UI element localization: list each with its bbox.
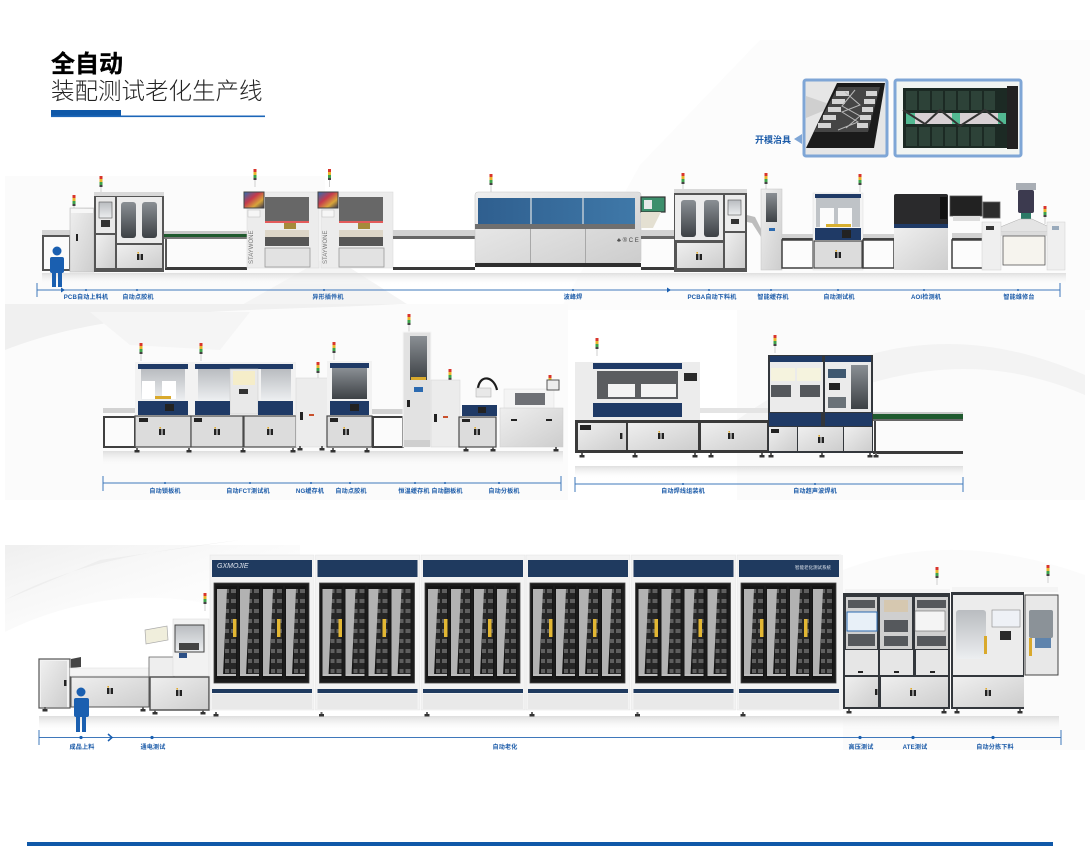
station labels: 智能缓存机: [757, 293, 789, 301]
machine: wire harness assembler: [575, 338, 700, 458]
machine: power-on test: [145, 593, 209, 714]
machine: product loader: [39, 657, 149, 712]
station labels: 成品上料: [70, 743, 94, 751]
station labels: PCBA自动下料机: [687, 293, 737, 301]
aging brand text: [217, 563, 831, 571]
conveyor: [164, 231, 247, 270]
machine: dispenser: [94, 176, 164, 272]
station labels: 自动点胶机: [122, 293, 154, 301]
panel: assembly line left: [103, 314, 563, 495]
station labels: 自动翻板机: [431, 487, 463, 495]
machine: PCBA unloader: [674, 173, 747, 272]
station labels: 波峰焊: [564, 293, 582, 301]
title line 1: 全自动: [51, 51, 123, 78]
monitors and conveyor: [950, 196, 1000, 268]
station labels: 恒温缓存机: [398, 487, 430, 495]
floor reflection: [42, 273, 1066, 285]
station labels: 自动分拣下料: [976, 743, 1014, 751]
station labels: 自动超声波焊机: [793, 487, 837, 495]
machine: splitter robot: [459, 378, 497, 452]
floor reflection: [103, 451, 563, 467]
station labels: ATE测试: [903, 743, 927, 751]
timeline axis: [39, 730, 1061, 745]
station labels: AOI检测机: [911, 293, 941, 301]
station labels: 自动测试机: [823, 293, 855, 301]
machine: SMT 1: [244, 169, 319, 268]
timeline axis: [103, 476, 561, 491]
station labels: 通电测试: [141, 743, 165, 751]
machine: high voltage and ATE test: [843, 567, 950, 714]
conveyor: [103, 408, 135, 447]
station labels: 异形插件机: [312, 293, 344, 301]
machine: FCT tester: [191, 343, 296, 452]
aging cabinet 6: [737, 555, 843, 716]
aging brand text: 智能老化测试系统: [795, 564, 831, 571]
machine: auto sorting unloader: [951, 565, 1058, 714]
machine: PCB loader: [42, 195, 94, 272]
timeline axis: [37, 283, 1060, 297]
machine: auto tester: [813, 174, 863, 270]
floor reflection: [575, 466, 963, 479]
machine: wave solder: [475, 174, 641, 267]
monitor and conveyor: [641, 197, 675, 270]
station labels: 自动点胶机: [335, 487, 367, 495]
title line 2: 装配测试老化生产线: [51, 78, 262, 104]
machine: AOI: [894, 194, 948, 270]
title: [51, 51, 265, 117]
station labels: 自动FCT测试机: [226, 487, 270, 495]
title underline: [51, 110, 265, 117]
panel: SMT line row: [37, 169, 1066, 301]
aging cabinet 3: [421, 555, 525, 716]
station labels: PCB自动上料机: [64, 293, 108, 301]
panel: assembly line right: [575, 335, 963, 495]
machine: thermostatic buffer: [403, 314, 431, 447]
photo: open jig: [804, 80, 887, 156]
machine: dispenser: [327, 342, 372, 452]
station labels: 自动老化: [493, 743, 517, 751]
machine: board loader: [134, 343, 192, 452]
station labels: [149, 487, 520, 495]
jig label: 开模治具: [755, 134, 791, 145]
station labels: 自动锁板机: [149, 487, 181, 495]
panel: aging test line: [39, 555, 1061, 751]
station labels: [70, 743, 1014, 751]
machine: ultrasonic welder: [768, 335, 873, 458]
machine: NG buffer: [296, 362, 328, 450]
machine: board splitter: [500, 375, 563, 452]
conveyor module: [700, 408, 768, 458]
machine: wave solder: ♣ ® C E: [617, 237, 639, 244]
station labels: NG缓存机: [296, 487, 324, 495]
machine: repair station: [982, 183, 1065, 270]
machine: buffer: [747, 173, 782, 270]
station labels: 自动分板机: [488, 487, 520, 495]
aging cabinet 2: [316, 555, 420, 716]
callout pointer: [794, 134, 802, 144]
machine: auto flip: [431, 369, 460, 447]
station labels: [661, 487, 837, 495]
footer bar: [27, 842, 1053, 846]
machine: SMT 2: [318, 169, 393, 268]
conveyor: [393, 230, 475, 270]
panel: jig photos: [755, 80, 1021, 156]
conveyor: [863, 234, 894, 268]
aging brand text: GXMOJIE: [217, 563, 249, 570]
timeline axis: [575, 477, 963, 492]
station labels: 自动焊线组装机: [661, 487, 705, 495]
aging cabinet 5: [632, 555, 736, 716]
person icon: [74, 688, 89, 732]
aging cabinet 4: [526, 555, 630, 716]
person icon: [50, 246, 64, 287]
conveyor: [372, 409, 403, 447]
conveyor: [873, 412, 963, 458]
station labels: 智能维修台: [1003, 293, 1035, 301]
aging cabinet 1: [210, 555, 314, 716]
station labels: 高压测试: [849, 743, 873, 751]
floor reflection: [39, 716, 1059, 732]
photo: jig top view: [895, 80, 1021, 156]
conveyor: [782, 234, 813, 268]
station labels: [64, 293, 1035, 301]
